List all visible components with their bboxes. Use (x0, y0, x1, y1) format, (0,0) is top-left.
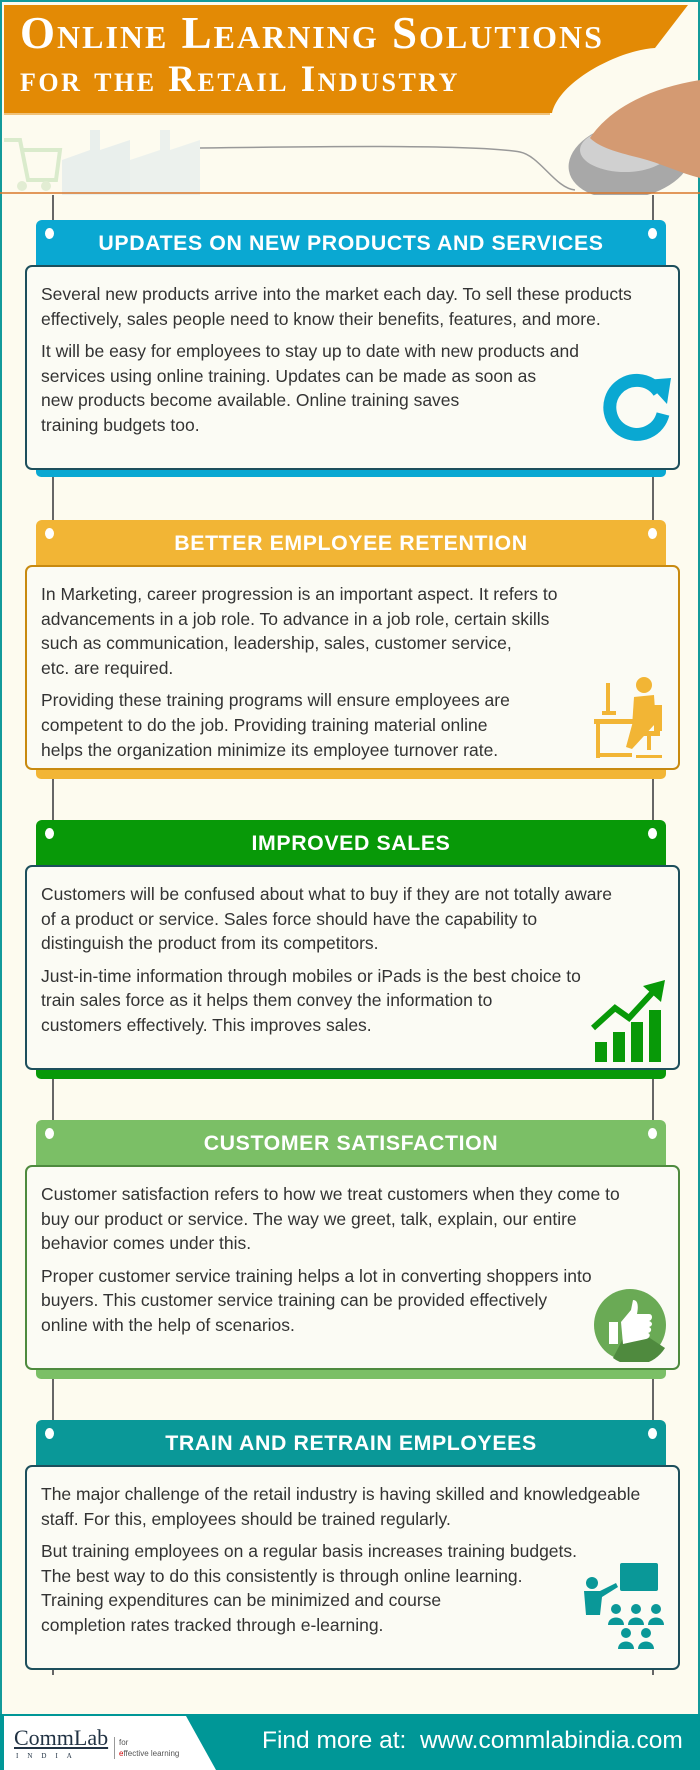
text block: Customers will be confused about what to buy if they are not totally aware (41, 884, 612, 904)
icon: mouse cable (200, 147, 575, 190)
text block: advancements in a job role. To advance in a job role, certain skills (41, 609, 549, 629)
footer (0, 1714, 700, 1770)
text block: behavior comes under this. (41, 1233, 251, 1253)
text block: Proper customer service training helps a lot in converting shoppers into (41, 1266, 592, 1286)
text block: It will be easy for employees to stay up to date with new products and (41, 341, 579, 361)
text block: effectively, sales people need to know their benefits, features, and more. (41, 309, 601, 329)
text block: buy our product or service. The way we greet, talk, explain, our entire (41, 1209, 577, 1229)
text block (25, 1165, 680, 1370)
text block: distinguish the product from its competitors. (41, 933, 379, 953)
text block: Just-in-time information through mobiles or iPads is the best choice to (41, 966, 581, 986)
icon: desk worker (594, 677, 662, 758)
heading: TRAIN AND RETRAIN EMPLOYEES (165, 1431, 537, 1455)
footer: for (119, 1738, 128, 1747)
icon: mouse (562, 112, 698, 208)
header banner: for the Retail Industry (20, 59, 460, 100)
text block: customers effectively. This improves sales. (41, 1015, 372, 1035)
text block: services using online training. Updates can be made as soon as (41, 366, 536, 386)
panel: updates (25, 220, 680, 477)
header banner (0, 5, 700, 195)
logo: CommLab (14, 1725, 108, 1750)
heading: CUSTOMER SATISFACTION (204, 1131, 498, 1155)
footer: effective learning (119, 1749, 179, 1758)
heading (36, 1420, 666, 1466)
icon: refresh (603, 374, 671, 441)
heading: UPDATES ON NEW PRODUCTS AND SERVICES (98, 231, 604, 255)
text block (25, 565, 680, 770)
icon: faint cart and factories (4, 130, 200, 195)
text block: Training expenditures can be minimized and course (41, 1590, 441, 1610)
panel: train (25, 1420, 680, 1670)
heading (36, 220, 666, 266)
panel: sales (25, 820, 680, 1079)
text block: Several new products arrive into the market each day. To sell these products (41, 284, 632, 304)
text block: helps the organization minimize its employee turnover rate. (41, 740, 498, 760)
icon: hand (590, 80, 700, 178)
text block: training budgets too. (41, 415, 200, 435)
heading (36, 1120, 666, 1166)
icon: growth chart (591, 980, 665, 1062)
heading (36, 520, 666, 566)
text block: The best way to do this consistently is through online learning. (41, 1566, 523, 1586)
text block (25, 1465, 680, 1670)
title text: Online Learning Solutions (20, 8, 604, 58)
text block: train sales force as it helps them convey the information to (41, 990, 492, 1010)
orange banner shape (4, 5, 688, 113)
panel: satisfaction (25, 1120, 680, 1379)
footer: INDIA (16, 1752, 81, 1760)
text block: In Marketing, career progression is an important aspect. It refers to (41, 584, 557, 604)
text block: completion rates tracked through e-learning. (41, 1615, 383, 1635)
text block (25, 865, 680, 1070)
text block: online with the help of scenarios. (41, 1315, 295, 1335)
heading: IMPROVED SALES (252, 831, 450, 855)
text block: staff. For this, employees should be trained regularly. (41, 1509, 451, 1529)
text block: Providing these training programs will ensure employees are (41, 690, 510, 710)
text block: etc. are required. (41, 658, 173, 678)
icon: thumbs up (594, 1289, 666, 1362)
footer text: Find more at: www.commlabindia.com (262, 1727, 683, 1754)
text block (25, 265, 680, 470)
text block: new products become available. Online training saves (41, 390, 459, 410)
text block: The major challenge of the retail industry is having skilled and knowledgeable (41, 1484, 640, 1504)
logo panel (4, 1716, 216, 1770)
panel: retention (25, 520, 680, 779)
text block: such as communication, leadership, sales, customer service, (41, 633, 512, 653)
text block: buyers. This customer service training can be provided effectively (41, 1290, 547, 1310)
text block: But training employees on a regular basis increases training budgets. (41, 1541, 577, 1561)
heading: BETTER EMPLOYEE RETENTION (174, 531, 528, 555)
heading (36, 820, 666, 866)
icon: classroom (584, 1563, 664, 1649)
text block: competent to do the job. Providing training material online (41, 715, 488, 735)
text block: of a product or service. Sales force should have the capability to (41, 909, 537, 929)
text block: Customer satisfaction refers to how we treat customers when they come to (41, 1184, 620, 1204)
